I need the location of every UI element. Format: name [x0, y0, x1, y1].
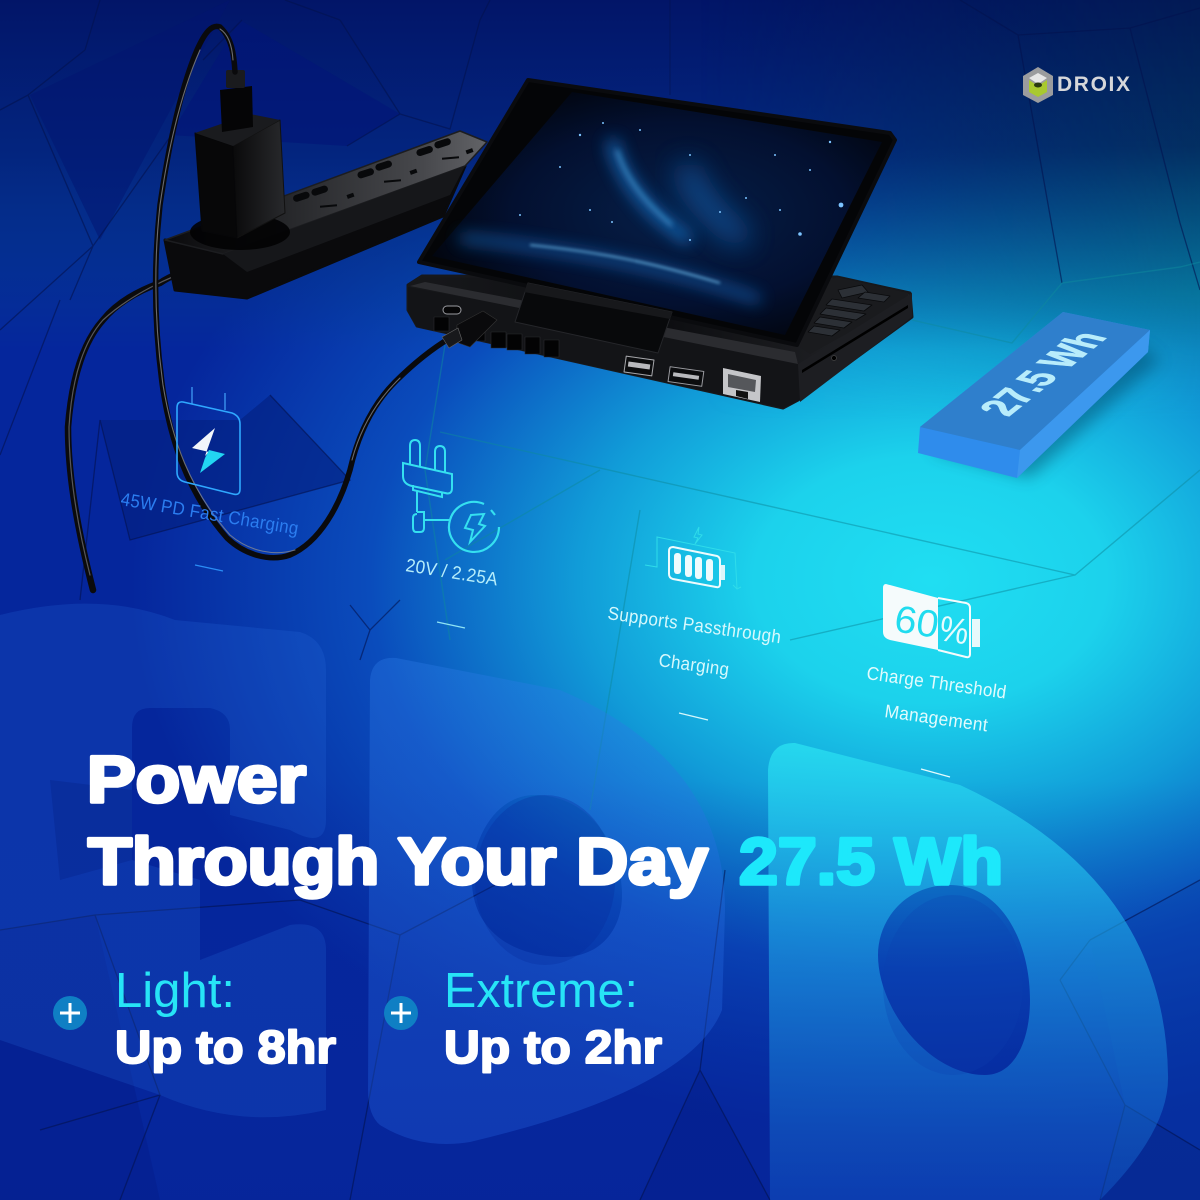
mini laptop [408, 80, 912, 408]
keyboard deck [800, 277, 908, 354]
wall charger with cable head [190, 70, 290, 250]
feature: passthrough charging [606, 527, 783, 720]
cable connector [442, 311, 497, 348]
headline [87, 742, 1003, 898]
laptop base [408, 276, 912, 408]
front face [408, 287, 800, 408]
icon: battery with flow [645, 527, 741, 589]
watermark letter shapes [0, 604, 1168, 1200]
audio jack [832, 356, 836, 360]
battery block 27.5 Wh [918, 312, 1160, 478]
stat: extreme usage [384, 964, 662, 1073]
logo hexagon [1023, 67, 1053, 103]
icon: charger with bolt [177, 387, 240, 494]
hinge bar [515, 283, 672, 353]
vents [434, 317, 559, 357]
heading line 2: Through Your Day [88, 824, 708, 898]
plus icon [53, 996, 87, 1030]
feature: charge threshold: Management [883, 700, 989, 735]
heading line 1: Power [87, 742, 306, 816]
value: Up to 2hr [444, 1021, 662, 1073]
icon: battery 60 percent: % [937, 607, 972, 652]
logo wordmark: DROIX [1057, 73, 1130, 96]
display [432, 92, 882, 335]
dash [195, 565, 223, 571]
value: Up to 8hr [115, 1021, 336, 1073]
battery label: 27.5 Wh [967, 328, 1118, 419]
Ethernet port [723, 368, 761, 402]
screen lid [419, 80, 895, 345]
icon: plug and power [403, 440, 499, 552]
aurora glows [460, 140, 760, 300]
stars [519, 122, 843, 241]
USB-C port [443, 306, 461, 314]
logo [1023, 67, 1130, 103]
power strip [165, 131, 487, 298]
capacity value: 27.5 Wh [739, 824, 1003, 898]
keyboard keys [808, 285, 890, 336]
socket holes [292, 137, 474, 208]
feature: passthrough charging: Charging [657, 649, 731, 680]
label: 20V / 2.25A [404, 554, 500, 590]
feature: charge threshold [865, 584, 1008, 777]
icon: battery 60 percent [883, 584, 980, 657]
dash [679, 713, 708, 720]
dash [921, 769, 950, 777]
teal edge lines [425, 262, 1200, 810]
power strip cord [68, 264, 207, 590]
HDMI port [668, 367, 704, 386]
label: 45W PD Fast Charging [119, 488, 300, 539]
label: Extreme: [444, 964, 638, 1018]
feature: 20V / 2.25A [403, 440, 500, 628]
label: Charge Threshold [865, 662, 1008, 703]
side face [798, 293, 912, 402]
label: Light: [115, 964, 235, 1018]
stat: light usage [53, 964, 336, 1073]
dash [437, 622, 465, 628]
USB port [624, 356, 654, 376]
plus icon [384, 996, 418, 1030]
main USB-C cable [155, 26, 450, 558]
label: Supports Passthrough [606, 602, 783, 647]
icon: battery 60 percent: 60 [892, 598, 942, 647]
feature: 45W PD fast charging [119, 387, 300, 571]
